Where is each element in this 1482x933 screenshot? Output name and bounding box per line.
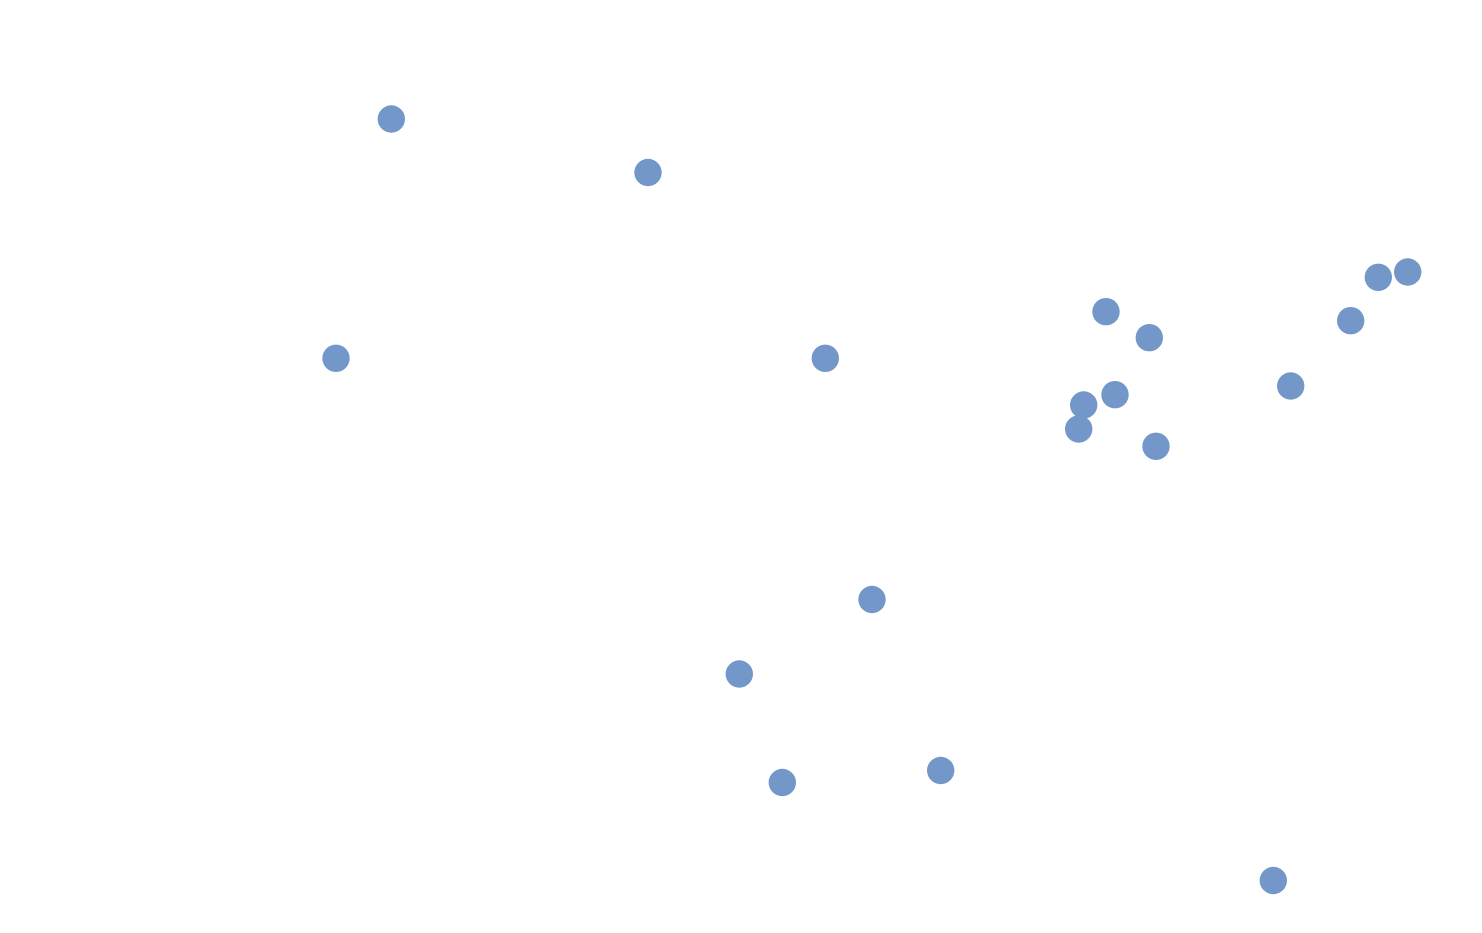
chart points — [322, 105, 1421, 894]
